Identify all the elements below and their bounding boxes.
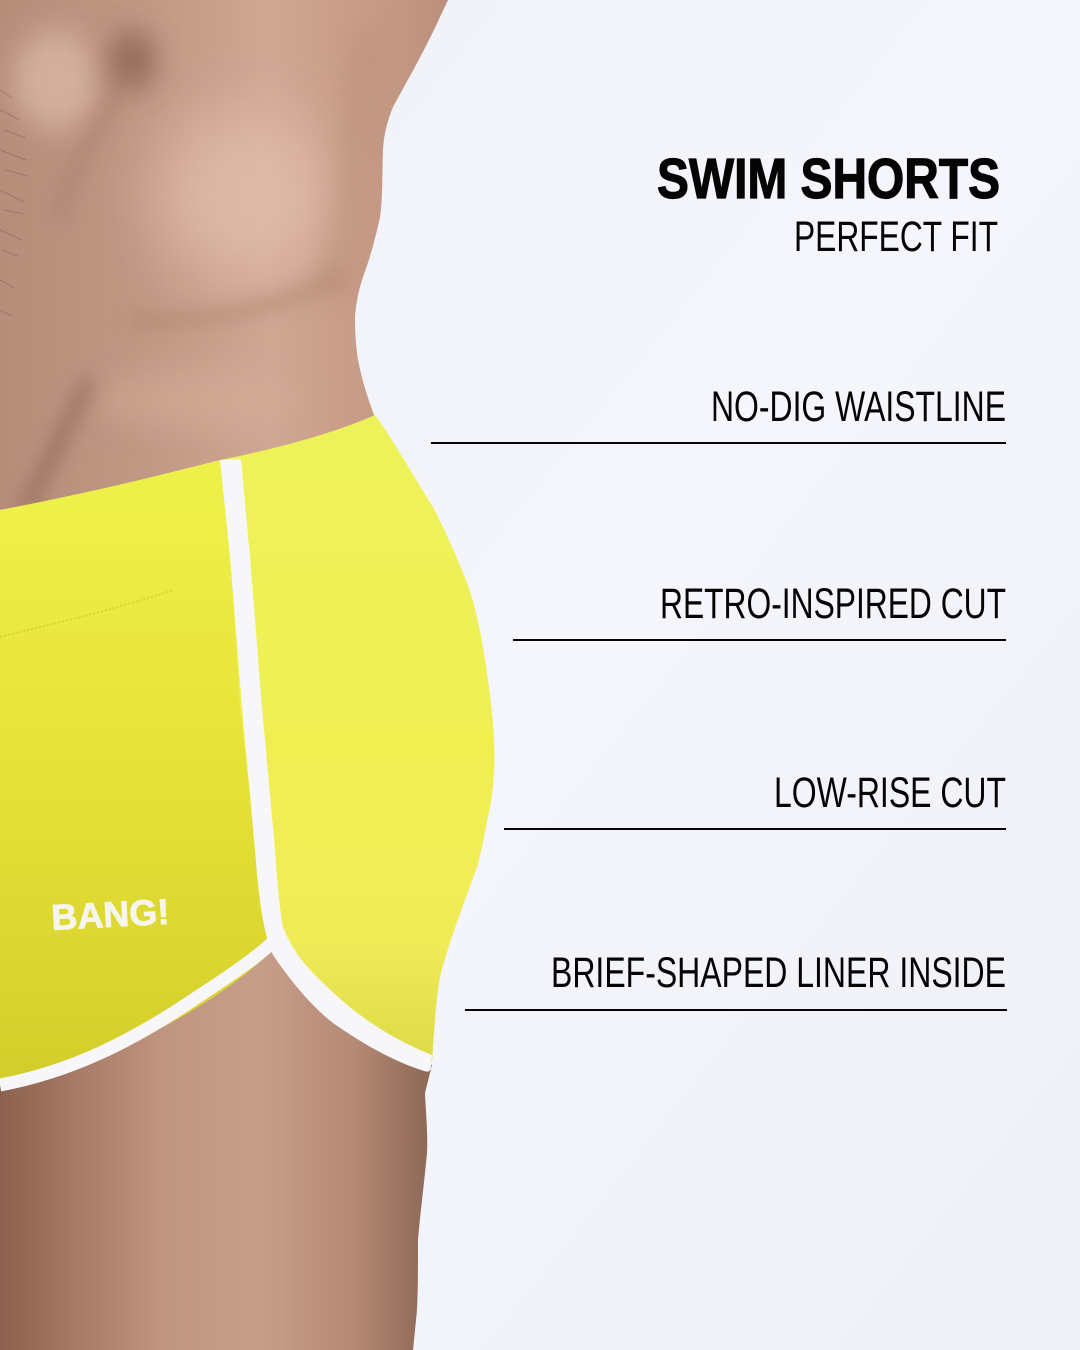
hem piping <box>0 943 272 1085</box>
front panel shading <box>0 460 273 1085</box>
waistband stitching <box>0 590 173 637</box>
feature: low-rise cut: LOW-RISE CUT <box>774 769 1006 817</box>
shorts body <box>0 415 494 1085</box>
title: SWIM SHORTS <box>657 147 1000 211</box>
chest hair <box>0 90 28 316</box>
subtitle: PERFECT FIT <box>794 213 998 261</box>
torso <box>0 0 450 540</box>
brand logo: BANG! <box>50 891 170 938</box>
side panel piping <box>220 459 432 1072</box>
thigh <box>0 950 432 1350</box>
swim shorts <box>0 415 494 1085</box>
